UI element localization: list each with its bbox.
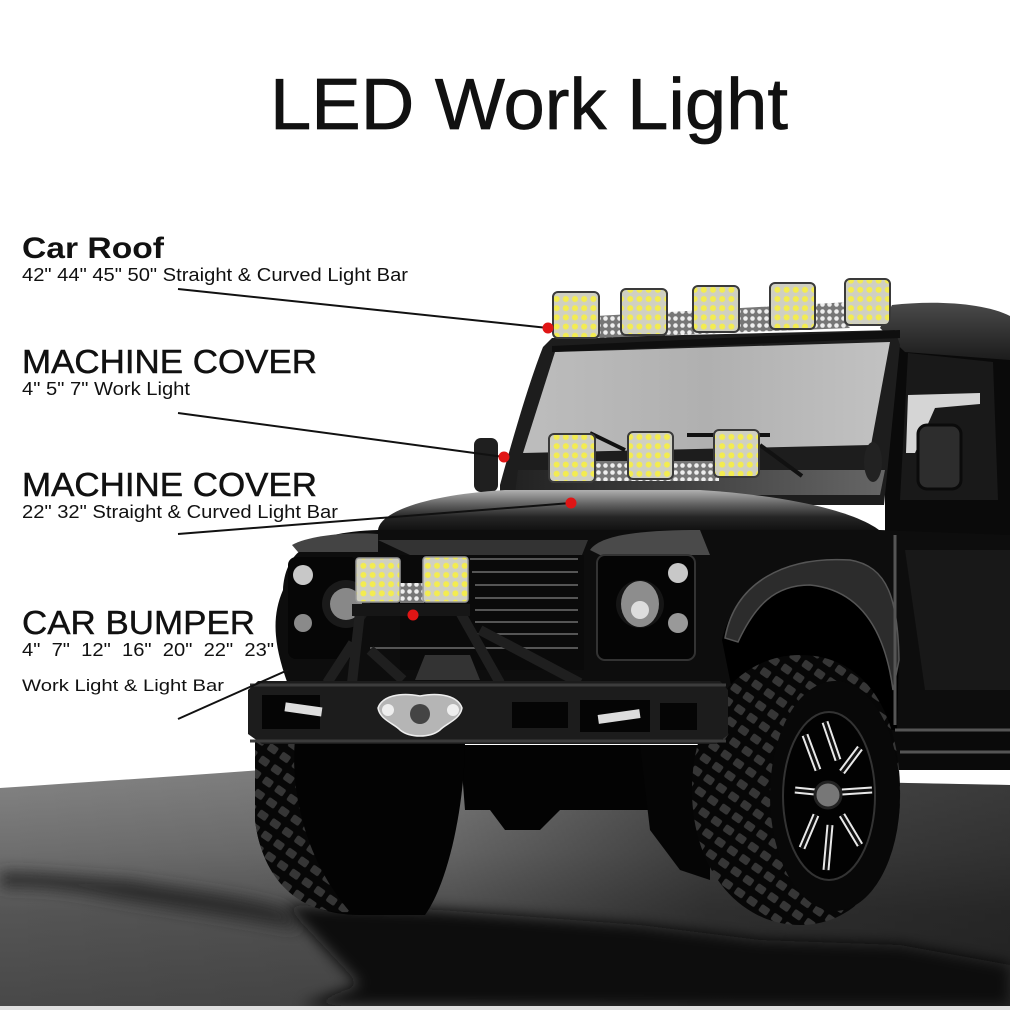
central shadow [285, 905, 1010, 1006]
side window [900, 353, 998, 500]
truck [248, 303, 1010, 925]
hood light bar [594, 461, 719, 481]
grille [370, 555, 584, 670]
fender highlight right [590, 530, 710, 555]
bull bar [327, 612, 580, 683]
callout: car roof: Car Roof [22, 232, 165, 265]
callout: machine cover light bar: MACHINE COVER [22, 466, 317, 503]
callout: machine cover light bar: 22" 32" Straight & Curved Light Bar [22, 502, 338, 522]
rear tyre shadow [640, 745, 710, 880]
right headlight [597, 555, 695, 660]
left headlight [288, 557, 370, 659]
truck rear body [885, 340, 1010, 770]
winch [378, 694, 462, 736]
callout: car roof [22, 232, 554, 334]
callout: car bumper: Work Light & Light Bar [22, 676, 224, 695]
window highlight [906, 393, 980, 453]
callout: car bumper: CAR BUMPER [22, 604, 255, 641]
wipers [590, 433, 802, 476]
front body [276, 530, 1010, 730]
bottom strip [0, 1006, 1010, 1010]
bull bar top [352, 604, 470, 616]
ground ruts [0, 872, 300, 930]
underbody [460, 745, 700, 830]
front left tyre [255, 740, 465, 915]
hood work lights [549, 430, 759, 482]
engine mount [415, 655, 480, 680]
callout: machine cover work light: MACHINE COVER [22, 343, 317, 380]
inner mirror [864, 442, 882, 482]
callout: car bumper: 4" 7" 12" 16" 20" 22" 23" [22, 640, 274, 660]
right ground shade [0, 770, 1010, 1006]
callout: machine cover light bar [22, 466, 576, 534]
door details [895, 535, 1010, 752]
body reflections [905, 550, 1010, 690]
side mirror right [918, 425, 961, 489]
lower cowl panel [515, 470, 885, 495]
side mirror left [474, 438, 498, 492]
roof light bars [596, 302, 850, 338]
roof work lights [553, 279, 890, 338]
bonnet [378, 490, 885, 535]
front right tyre [692, 655, 900, 925]
cab roof [880, 303, 1010, 360]
windshield [523, 342, 890, 453]
wheel arch flare [725, 560, 899, 690]
callout: machine cover work light [22, 343, 510, 462]
callout: machine cover work light: 4" 5" 7" Work Light [22, 379, 190, 399]
windshield frame [500, 330, 900, 505]
bumper [248, 681, 728, 744]
ground [0, 770, 1010, 1006]
title: LED Work Light [270, 65, 788, 145]
bumper work lights [356, 557, 468, 603]
wheel well [722, 562, 899, 730]
grille top strip [378, 540, 588, 555]
roof rack [552, 330, 900, 352]
fender highlight left [292, 533, 378, 552]
callout: car roof: 42" 44" 45" 50" Straight & Curved Light Bar [22, 265, 408, 285]
callout: car bumper [22, 604, 418, 719]
